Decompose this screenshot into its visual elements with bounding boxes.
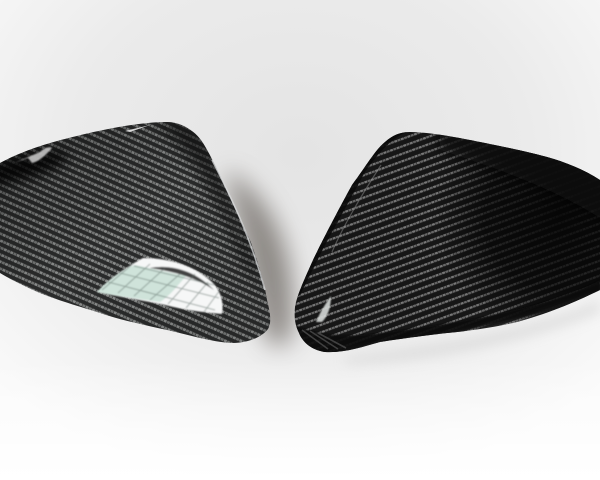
right cover left rim [298,132,406,296]
right cover lip weave [302,330,346,349]
reflection: top-left highlight [14,147,52,163]
reflection: window on lower cover [97,258,223,314]
reflection: small highlight on right cover [316,296,331,322]
right mirror cover [294,132,600,352]
right cover rim highlight [332,165,381,252]
cast shadows between the covers [225,170,293,346]
left cover dark right rim [160,118,262,290]
left cover pale edge highlight [212,160,265,290]
left cover dark upper-left corner [0,143,71,193]
left mirror cover [0,122,270,343]
right cover bottom lip [296,282,600,352]
left cover shading [0,122,270,343]
reflection: small top highlight [125,125,150,132]
right cover dark glossy area [440,141,600,323]
right cover top dark band [432,134,600,218]
bottom shadow under right cover [345,300,600,364]
